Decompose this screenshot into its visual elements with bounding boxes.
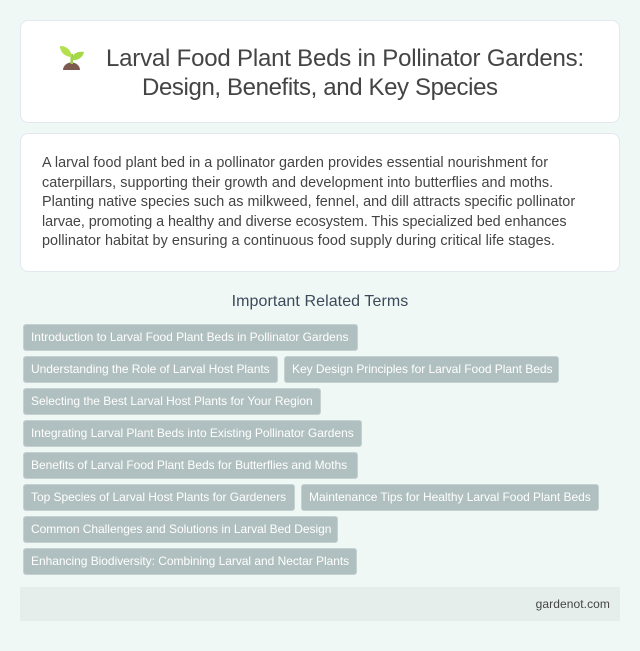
related terms chips: Benefits of Larval Food Plant Beds for Butterflies and Moths (31, 458, 347, 472)
section heading: Important Related Terms (232, 293, 408, 310)
related terms chips: Enhancing Biodiversity: Combining Larval and Nectar Plants (31, 554, 349, 568)
title: Design, Benefits, and Key Species (142, 74, 498, 101)
related terms chips (23, 324, 599, 575)
related terms chips: Understanding the Role of Larval Host Plants (31, 362, 270, 376)
related terms chips: Introduction to Larval Food Plant Beds in Pollinator Gardens (31, 330, 348, 344)
related terms chips: Common Challenges and Solutions in Larval Bed Design (31, 522, 331, 536)
intro text: A larval food plant bed in a pollinator garden provides essential nourishment for (42, 155, 548, 171)
intro text: Planting native species such as milkweed, fennel, and dill attracts specific pollinator (42, 194, 575, 210)
icon: seedling (60, 46, 84, 70)
title: Larval Food Plant Beds in Pollinator Gardens: (106, 45, 584, 72)
intro text panel (20, 133, 620, 272)
title (106, 45, 584, 101)
related terms chips: Top Species of Larval Host Plants for Gardeners (31, 490, 286, 504)
intro text: pollinator habitat by ensuring a continuous food supply during critical life stages. (42, 233, 555, 249)
intro text: caterpillars, supporting their growth and development into butterflies and moths. (42, 174, 553, 190)
header panel (20, 20, 620, 123)
intro text (42, 155, 575, 249)
related terms chips: Maintenance Tips for Healthy Larval Food Plant Beds (309, 490, 591, 504)
related terms chips: Selecting the Best Larval Host Plants for Your Region (31, 394, 313, 408)
footer bar (20, 587, 620, 621)
related terms chips: Integrating Larval Plant Beds into Existing Pollinator Gardens (31, 426, 354, 440)
intro text: larvae, promoting a healthy and diverse ecosystem. This specialized bed enhances (42, 214, 566, 230)
footer text: gardenot.com (536, 597, 610, 611)
related terms chips: Key Design Principles for Larval Food Plant Beds (292, 362, 552, 376)
